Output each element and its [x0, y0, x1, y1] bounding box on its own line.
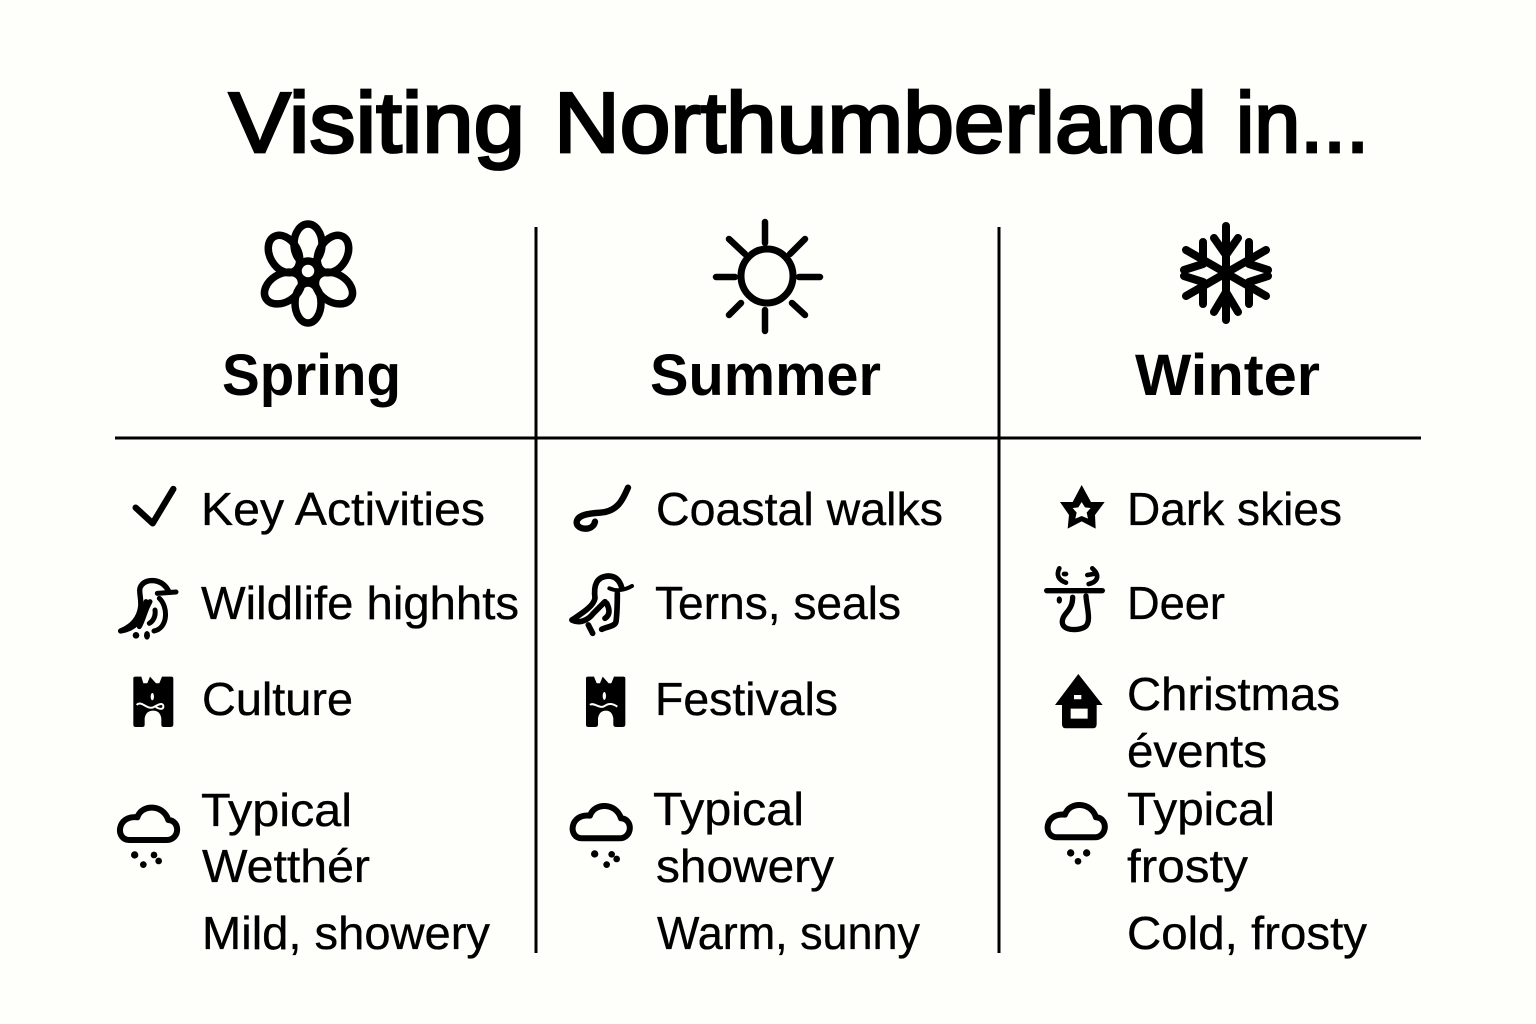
icon: rain cloud — [1048, 805, 1105, 865]
text: Christmas évents: évents — [1127, 725, 1267, 777]
text: Typical frosty — [1127, 783, 1275, 892]
text: Terns, seals: Terns, seals — [655, 577, 901, 629]
title: Northumberland — [554, 76, 1207, 171]
panel: winter — [1047, 226, 1367, 959]
text: Cold, frosty: Cold, frosty — [1127, 907, 1367, 959]
icon: sun — [716, 222, 820, 331]
text: Typical showery: showery — [656, 840, 834, 892]
icon: coastal path — [577, 488, 628, 529]
text: Typical frosty: frosty — [1127, 840, 1248, 892]
heading: Spring: Spring — [222, 343, 401, 408]
title: Visiting — [229, 76, 525, 171]
icon: bird — [121, 581, 176, 640]
panel: spring — [120, 224, 519, 959]
text: Deer: Deer — [1127, 577, 1225, 629]
text: Mild, showery: Mild, showery — [202, 907, 490, 959]
text: Typical frosty: Typical — [1127, 783, 1275, 835]
text: Typical Wetthér: Typical — [201, 784, 352, 836]
text: Culture: Culture — [202, 673, 353, 725]
panel: summer — [572, 222, 943, 959]
heading: Summer: Summer — [650, 343, 881, 408]
text: Typical Wetthér: Wetthér — [202, 840, 370, 892]
icon: flower — [259, 224, 358, 323]
icon: tern — [572, 576, 632, 633]
icon: rain cloud — [120, 808, 177, 868]
text: Warm, sunny: Warm, sunny — [657, 907, 920, 959]
icon: snowflake — [1184, 226, 1268, 320]
icon: star — [1060, 485, 1105, 529]
text: Dark skies: Dark skies — [1127, 483, 1342, 535]
title: in... — [1236, 76, 1369, 171]
text: Festivals: Festivals — [655, 673, 838, 725]
heading: Winter: Winter — [1135, 343, 1320, 408]
text: Christmas évents: Christmas — [1127, 668, 1340, 720]
text: Typical showery — [653, 783, 834, 892]
text: Typical showery: Typical — [653, 783, 804, 835]
icon: check mark — [136, 489, 173, 523]
icon: house — [1055, 674, 1103, 728]
text: Christmas évents — [1127, 668, 1340, 777]
icon: deer — [1047, 568, 1102, 630]
icon: rain cloud — [573, 806, 630, 868]
text: Typical Wetthér — [201, 784, 370, 892]
icon: castle — [133, 677, 173, 727]
icon: festival castle — [586, 677, 625, 727]
text: Wildlife highhts: Wildlife highhts — [201, 577, 519, 629]
text: Key Activities: Key Activities — [201, 483, 485, 535]
text: Coastal walks: Coastal walks — [656, 483, 943, 535]
